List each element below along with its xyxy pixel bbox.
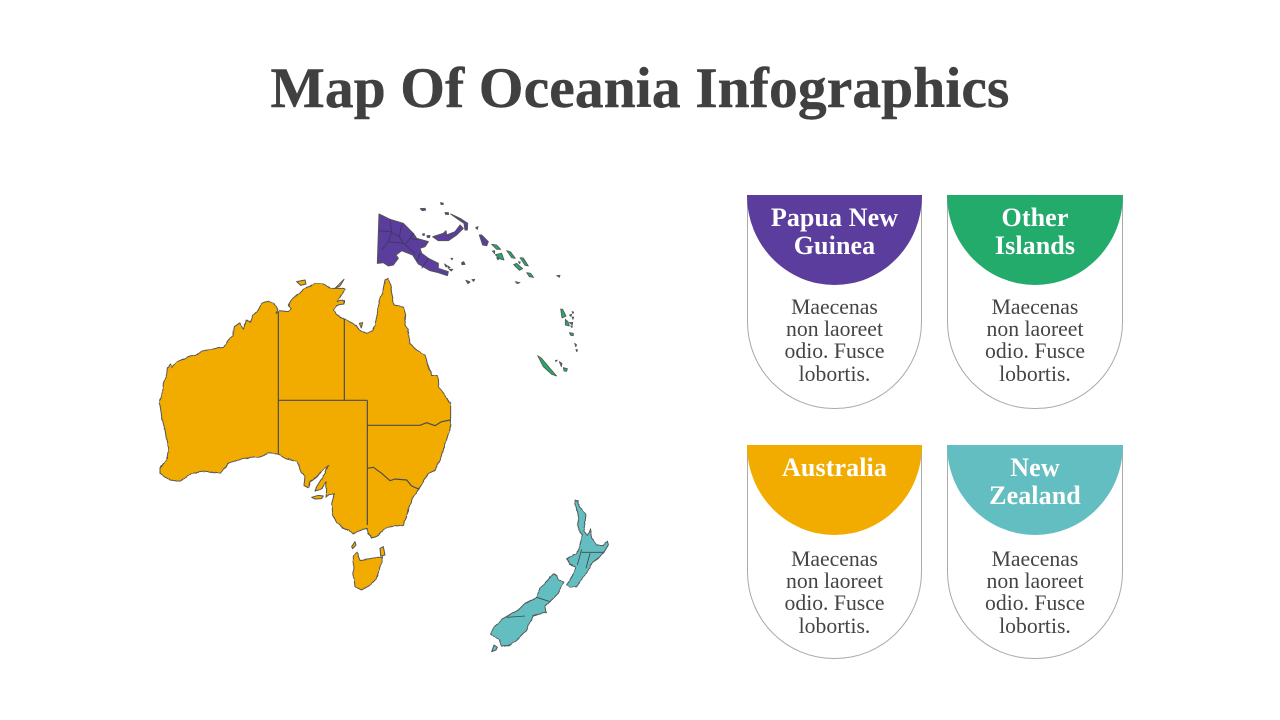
panel: Australia [747,445,922,659]
text block: Papua New Guinea: odio. Fusce [784,339,884,363]
small PNG islands [420,203,478,284]
New Caledonia [538,356,567,376]
Bougainville [479,235,488,246]
text block: New Zealand: lobortis. [999,614,1071,638]
header shape: Australia [747,445,922,535]
New Britain [433,225,463,241]
panel: Other Islands [947,195,1123,409]
text block: Australia: Maecenas [791,547,878,571]
text block: New Zealand: non laoreet [987,569,1083,593]
text block: Australia: lobortis. [799,614,870,638]
heading: New Zealand: Zealand [989,481,1081,510]
text block: Other Islands: Maecenas [992,295,1078,319]
heading: Other Islands [995,203,1075,260]
Kangaroo Island [312,495,323,499]
header shape: New Zealand [947,445,1123,535]
Tasmania [353,552,383,590]
map region: Australia [159,278,451,590]
text block: Australia: non laoreet [786,569,883,593]
New Ireland [451,214,468,230]
text block: Australia [784,547,884,638]
heading: Other Islands: Islands [995,231,1075,260]
heading: Papua New Guinea: Papua New [771,203,898,232]
heading: Australia: Australia [782,453,887,482]
text block: New Zealand: odio. Fusce [985,591,1085,615]
heading: Papua New Guinea: Guinea [794,231,875,260]
heading: Other Islands: Other [1002,203,1068,232]
map region: Papua New Guinea [377,203,488,284]
map region: Other Islands [492,244,578,376]
text block: Papua New Guinea [784,295,884,386]
text block: Other Islands: lobortis. [999,362,1071,386]
text block: Australia: odio. Fusce [784,591,884,615]
panel: New Zealand [947,445,1123,659]
South Island [491,573,563,647]
text block: Other Islands: odio. Fusce [985,339,1085,363]
title: Map Of Oceania Infographics [270,57,1010,120]
text block: Papua New Guinea: Maecenas [791,295,878,319]
text block: Other Islands: non laoreet [987,317,1083,341]
text block: Papua New Guinea: non laoreet [786,317,883,341]
header shape: Papua New Guinea [747,195,922,285]
text block: Papua New Guinea: lobortis. [799,362,870,386]
North Island [567,501,608,588]
small Australian islands [297,279,385,556]
text block: New Zealand [985,547,1085,638]
map region: New Zealand [491,501,608,652]
regional borders [507,549,603,617]
heading: New Zealand [989,453,1081,510]
heading: New Zealand: New [1010,453,1060,482]
Stewart Island [492,645,497,652]
header shape: Other Islands [947,195,1123,285]
panel: Papua New Guinea [747,195,922,409]
text block: New Zealand: Maecenas [992,547,1078,571]
heading: Papua New Guinea [771,203,898,260]
text block: Other Islands [985,295,1085,386]
state borders [278,312,450,525]
